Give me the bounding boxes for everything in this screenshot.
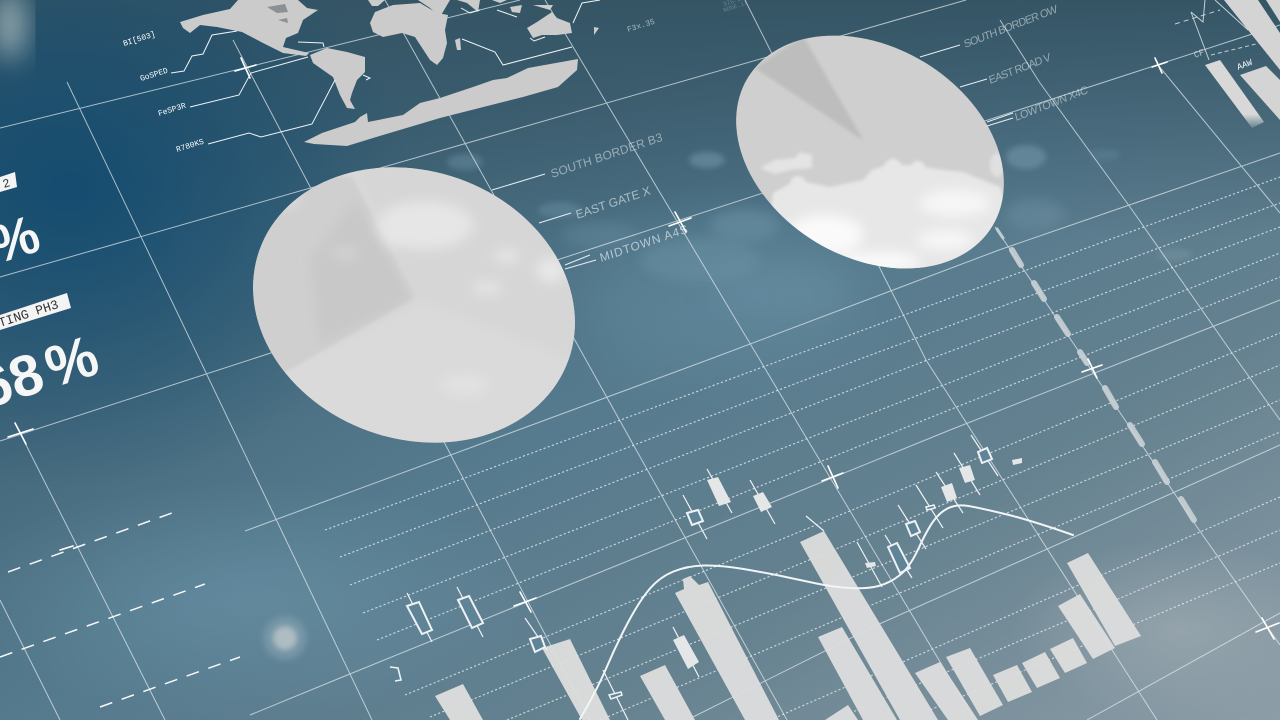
mini chart bars bbox=[1224, 0, 1280, 70]
map label texts: NODE.17 bbox=[722, 0, 749, 14]
south america bbox=[310, 48, 365, 109]
mini chart labels: CF bbox=[1193, 47, 1206, 61]
south border label: SOUTH BORDER B3 bbox=[549, 130, 664, 181]
midtown label: MIDTOWN A4S bbox=[598, 222, 689, 265]
north america bbox=[180, 0, 318, 56]
east gate label: EAST GATE X bbox=[574, 183, 652, 222]
candle wicks bbox=[407, 435, 998, 720]
lens glow orb bbox=[263, 616, 307, 660]
stat tag one: 2 bbox=[1, 176, 12, 192]
leaders bbox=[492, 174, 596, 269]
pie label group left bbox=[492, 130, 689, 269]
map label texts: FeSP3R bbox=[157, 102, 187, 119]
map callouts bbox=[122, 0, 749, 155]
world map bbox=[180, 0, 599, 146]
hollow candle bodies bbox=[407, 448, 992, 699]
stat tag one bbox=[0, 172, 17, 192]
candlestick chart bbox=[390, 435, 1022, 720]
east road label: EAST ROAD V bbox=[988, 51, 1053, 87]
thick dashed trend line bbox=[997, 229, 1194, 520]
africa bbox=[370, 3, 448, 65]
left stat panel bbox=[0, 172, 106, 421]
top right mini chart: AAW bbox=[1236, 57, 1254, 73]
clouds in right pie bbox=[762, 152, 1004, 268]
pie chart right bbox=[736, 36, 1004, 268]
map label texts bbox=[122, 0, 749, 155]
dashed series lines bbox=[0, 513, 240, 707]
trend curve bbox=[580, 505, 1073, 719]
islands bbox=[455, 27, 599, 50]
mini chart lines bbox=[1175, 0, 1260, 60]
leader lines bbox=[171, 0, 600, 144]
eurasia fragments bbox=[368, 0, 553, 17]
top right mini chart bbox=[1175, 0, 1280, 128]
bar chart bbox=[435, 531, 1141, 720]
lowtown label: LOWTOWN X4C bbox=[1014, 84, 1089, 124]
bracket mark bbox=[390, 667, 401, 681]
south border label: SOUTH BORDER OW bbox=[963, 3, 1059, 51]
map label texts: BI[503] bbox=[122, 30, 157, 49]
map label texts: F3x.35 bbox=[626, 18, 656, 35]
darker sector bbox=[253, 175, 364, 373]
map label texts: GoSPED bbox=[139, 67, 169, 84]
clouds in left pie bbox=[289, 200, 566, 292]
australia bbox=[527, 12, 572, 38]
map label texts: R780KS bbox=[175, 138, 205, 155]
upper right segment tone bbox=[354, 167, 575, 361]
pie chart left bbox=[253, 167, 575, 443]
leaders bbox=[920, 45, 1013, 126]
antarctica bbox=[304, 59, 578, 146]
darker sector bbox=[755, 36, 864, 141]
interior patches bbox=[267, 4, 288, 23]
filled candle bodies bbox=[673, 458, 1022, 669]
pie label group right bbox=[920, 3, 1089, 126]
